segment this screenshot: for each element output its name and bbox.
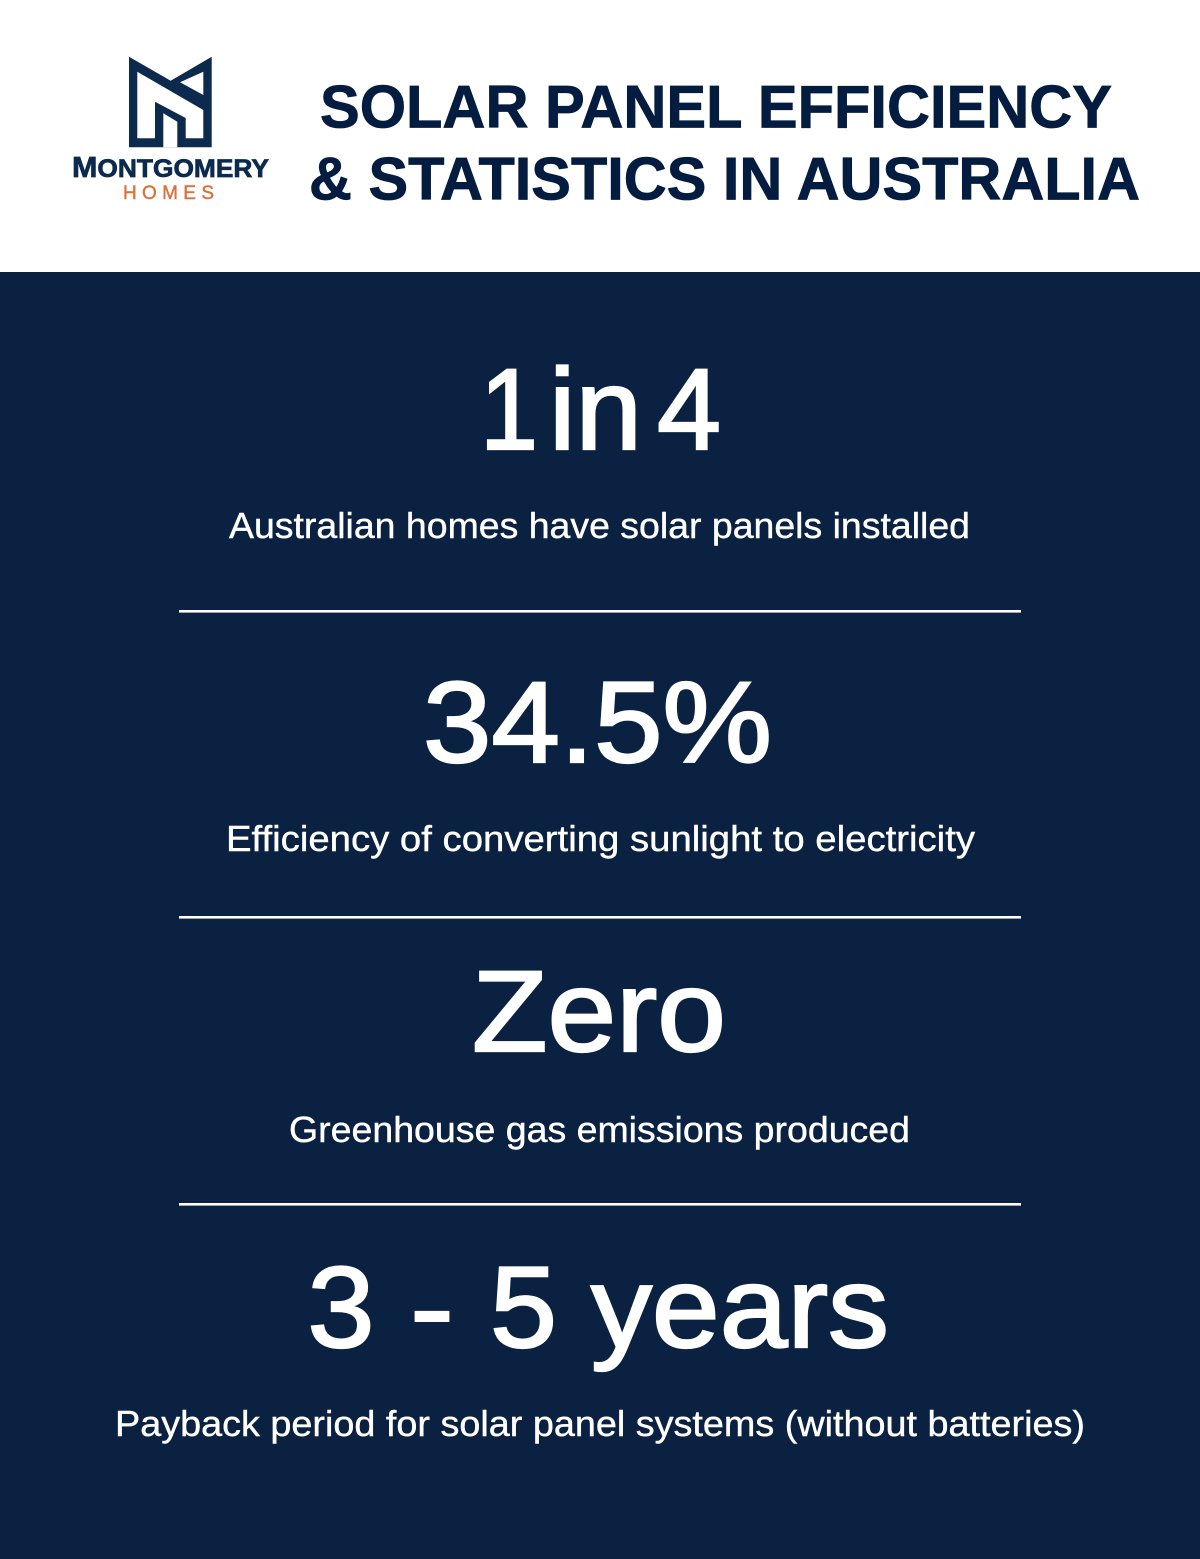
stat description: Greenhouse gas emissions produced (289, 1109, 910, 1150)
stat: 34.5% (226, 659, 975, 859)
stat: 1 in 4: 4 (657, 346, 721, 474)
stat: 1 in 4: in (549, 346, 642, 474)
icon: M and house monogram (129, 57, 212, 147)
title (309, 74, 1140, 212)
stat: Zero: Zero (472, 948, 726, 1076)
stat: 3 - 5 years (115, 1244, 1085, 1444)
stat: 34.5%: 34.5% (423, 659, 772, 787)
stat description: Australian homes have solar panels installed (229, 505, 970, 546)
title: SOLAR PANEL EFFICIENCY (320, 74, 1112, 140)
stat: 3 - 5 years: 5 (490, 1244, 557, 1372)
logo: Montgomery Homes (72, 57, 269, 204)
stat: 1 in 4: 1 (480, 346, 538, 474)
stat description: Payback period for solar panel systems (without batteries) (115, 1403, 1085, 1444)
stat: 1 in 4 (229, 346, 970, 546)
title: & STATISTICS IN AUSTRALIA (309, 146, 1140, 212)
stat: 3 - 5 years: 3 (308, 1244, 374, 1372)
logo subtitle: HOMES (123, 183, 214, 204)
stat: Zero (289, 948, 910, 1150)
stat: 3 - 5 years: years (591, 1244, 889, 1372)
stat description: Efficiency of converting sunlight to electricity (226, 818, 975, 859)
stat: 3 - 5 years: - (410, 1244, 454, 1372)
logo wordmark: MONTGOMERY (72, 152, 269, 184)
